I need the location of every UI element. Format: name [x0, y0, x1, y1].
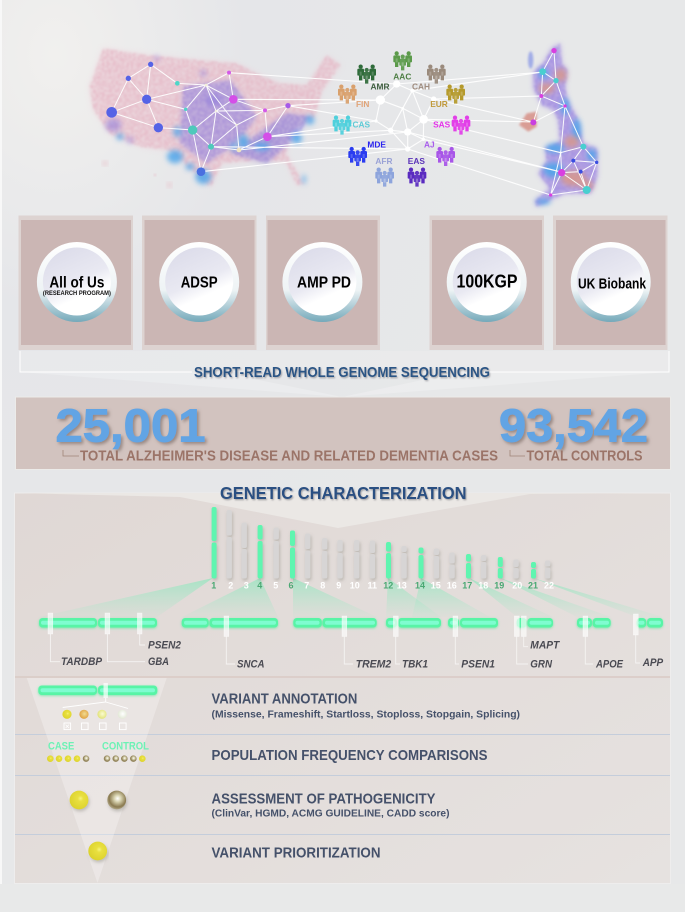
panel: ADSP	[142, 216, 256, 350]
population: EUR: EUR	[430, 99, 448, 109]
variant balls and checkboxes	[62, 710, 127, 730]
chromosome numbers: 3	[244, 580, 249, 590]
chromosome numbers: 4	[257, 580, 262, 590]
chromosome numbers: 18	[478, 580, 488, 590]
population: CAH: CAH	[412, 81, 430, 91]
label: control: CONTROL	[102, 741, 149, 753]
gene: APP	[633, 614, 664, 669]
pathogenicity balls	[70, 791, 126, 809]
gene: TBK1: TBK1	[402, 658, 428, 670]
chromosome numbers: 14	[415, 580, 425, 590]
prioritized variant ball	[88, 842, 107, 860]
gene: MAPT: MAPT	[530, 639, 560, 651]
stat: 93,542 controls: 93,542	[499, 400, 648, 452]
panel: ADSP: ADSP	[181, 274, 218, 292]
gene: GRN: GRN	[530, 658, 553, 670]
network nodes: central	[374, 80, 436, 152]
chromosome numbers: 13	[397, 580, 407, 590]
fans from chromosomes to gene bars	[39, 578, 663, 617]
text: variant annotation: (Missense, Frameshift, Startloss, Stoploss, Stopgain, Splicing)	[212, 708, 520, 720]
label: total controls: TOTAL CONTROLS	[526, 448, 642, 464]
bracket: sequencing funnel	[20, 351, 669, 397]
gene: GBA: GBA	[148, 656, 169, 668]
gene: GRN	[514, 616, 553, 670]
heading: short-read whole genome sequencing: SHORT-READ WHOLE GENOME SEQUENCING	[194, 364, 490, 381]
panel: All of Us: All of Us	[49, 274, 104, 292]
chromosome numbers: 5	[273, 580, 278, 590]
chromosome numbers: 7	[304, 580, 309, 590]
panel: UK Biobank	[553, 216, 668, 350]
panel: AMP PD	[266, 216, 380, 350]
gene: SNCA	[224, 616, 265, 670]
gene map: chromosome close-ups	[39, 613, 664, 670]
panel: UK Biobank: UK Biobank	[578, 276, 647, 292]
chromosome numbers: 11	[368, 580, 377, 590]
chromosome numbers: 6	[288, 580, 294, 590]
text: variant prioritization: VARIANT PRIORITIZATION	[212, 844, 380, 861]
label: case: CASE	[48, 741, 74, 753]
population: CAS: CAS	[353, 120, 371, 130]
chromosome numbers: 15	[431, 580, 441, 590]
population: FIN: FIN	[356, 99, 369, 109]
network: long links	[201, 73, 408, 172]
case and control allele balls	[47, 755, 146, 762]
panel: 100KGP: 100KGP	[456, 272, 518, 292]
label: total cases: TOTAL ALZHEIMER'S DISEASE AND RELATED DEMENTIA CASES	[80, 448, 498, 464]
gene: APOE: APOE	[595, 658, 624, 670]
panel: All of Us	[18, 216, 133, 350]
population: AAC: AAC	[393, 71, 411, 81]
text: assessment of pathogenicity	[212, 790, 450, 820]
population: SAS: SAS	[433, 120, 451, 130]
panel: genetic characterization	[14, 493, 670, 884]
gene: TREM2	[342, 616, 391, 670]
chromosome numbers: 20	[512, 580, 522, 590]
network: UK internal edges	[533, 51, 597, 195]
network nodes: UK	[530, 48, 598, 197]
population: AFR: AFR	[375, 156, 393, 166]
chromosomes highlighted in green	[212, 507, 536, 578]
map: United Kingdom	[519, 43, 597, 207]
panel: All of Us: (RESEARCH PROGRAM)	[43, 290, 111, 297]
chromosome numbers: 1	[211, 580, 216, 590]
population: AMR: AMR	[371, 81, 389, 91]
text: variant annotation: VARIANT ANNOTATION	[212, 690, 357, 707]
gene: GBA	[105, 613, 169, 668]
chromosome numbers: 17	[462, 580, 472, 590]
chromosome numbers	[211, 580, 554, 590]
funnel: variant filtering	[27, 678, 167, 883]
text: population frequency comparisons: POPULATION FREQUENCY COMPARISONS	[212, 747, 488, 764]
chromosome numbers: 12	[383, 580, 393, 590]
network: lines linking US, population groups and UK	[112, 51, 597, 195]
text: assessment of pathogenicity: (ClinVar, HGMD, ACMG GUIDELINE, CADD score)	[212, 808, 450, 820]
network nodes: US	[106, 62, 291, 176]
gene: PSEN2	[137, 613, 181, 651]
chromosome numbers: 21	[528, 580, 538, 590]
chromosomes in grey	[226, 510, 550, 578]
gene: TBK1	[393, 616, 428, 670]
population: MDE: MDE	[367, 139, 386, 149]
gene: APP: APP	[642, 657, 664, 669]
gene: MAPT	[521, 616, 560, 651]
gene: TARDBP: TARDBP	[61, 656, 103, 668]
gene: APOE	[583, 616, 624, 670]
gene: PSEN2: PSEN2	[148, 639, 181, 651]
chart: chromosome ideograms	[211, 507, 554, 590]
gene: PSEN1	[453, 616, 495, 670]
gene bars	[39, 618, 663, 628]
population: AJ: AJ	[424, 139, 435, 149]
network: US internal edges	[112, 64, 288, 172]
text: variant annotation	[212, 690, 520, 720]
panel: 100KGP	[430, 216, 544, 350]
network: central population graph	[376, 84, 434, 149]
population: EAS: EAS	[408, 156, 425, 166]
chromosome numbers: 10	[350, 580, 360, 590]
heading: genetic characterization: GENETIC CHARACTERIZATION	[220, 483, 466, 503]
population groups	[333, 51, 470, 187]
chromosome numbers: 22	[544, 580, 554, 590]
text: assessment of pathogenicity: ASSESSMENT OF PATHOGENICITY	[212, 790, 436, 807]
funnel chromosome bar	[38, 683, 157, 708]
stat: 25,001 cases: 25,001	[56, 400, 206, 452]
gene: PSEN1: PSEN1	[461, 658, 495, 670]
gene: TREM2: TREM2	[356, 658, 391, 670]
gene: TARDBP	[48, 613, 103, 668]
chromosome numbers: 19	[494, 580, 504, 590]
panel: cohort totals	[16, 397, 670, 470]
chromosome numbers: 8	[320, 580, 325, 590]
gene: SNCA: SNCA	[237, 658, 265, 670]
map: United States	[89, 48, 341, 187]
chromosome numbers: 16	[447, 580, 457, 590]
chromosome numbers: 2	[228, 580, 233, 590]
panel: AMP PD: AMP PD	[297, 274, 351, 292]
chromosome numbers: 9	[336, 580, 341, 590]
